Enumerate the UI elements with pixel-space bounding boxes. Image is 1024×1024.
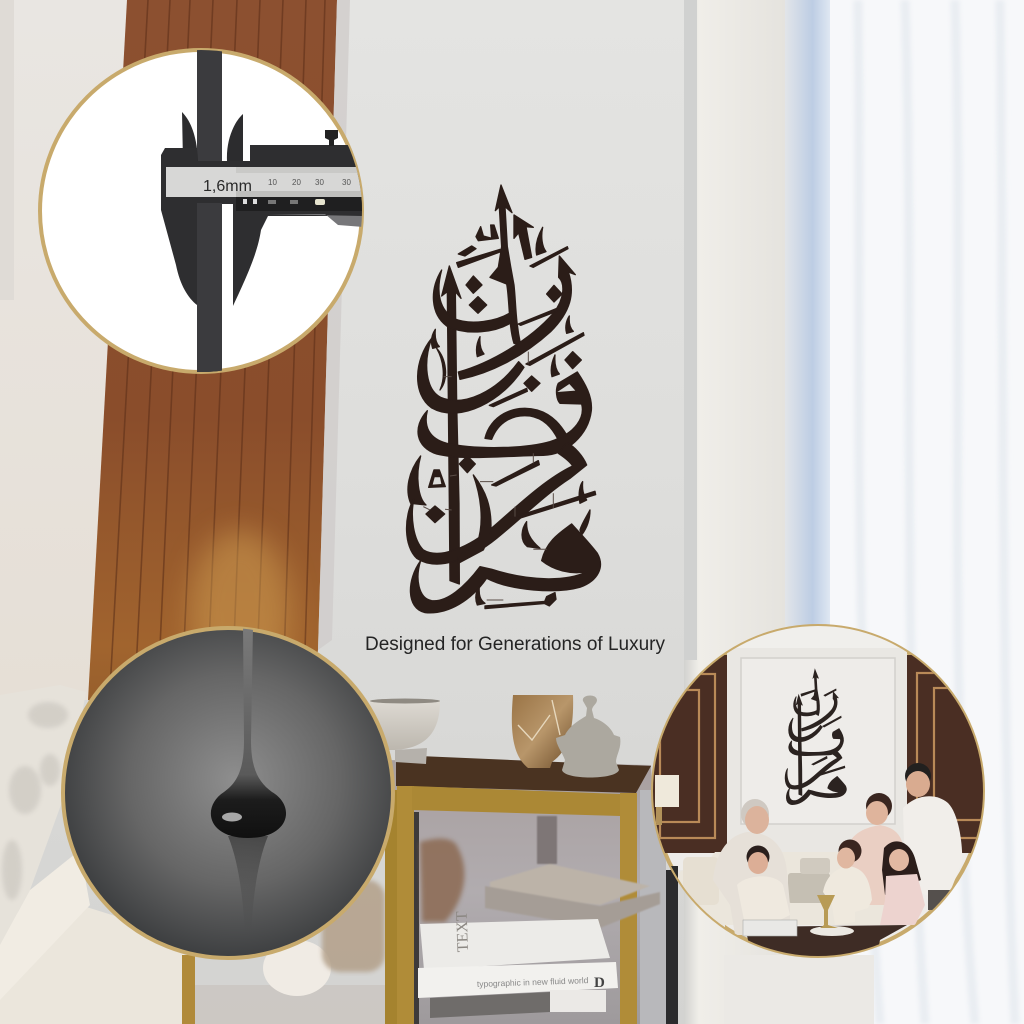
measurement reading: 1,6mm — [203, 178, 252, 195]
scale numbers: 30 — [315, 178, 324, 187]
circle: caliper thickness measurement — [40, 48, 364, 378]
scale numbers: 30 — [342, 178, 351, 187]
sofa and cushion — [0, 685, 195, 1024]
mother — [852, 793, 902, 905]
reflection beneath drop — [228, 836, 268, 898]
thumb screw — [325, 130, 338, 146]
brown marble cup — [512, 695, 573, 768]
calligraphy wall art — [407, 185, 600, 613]
small calligraphy on wall — [785, 670, 846, 805]
wall shadow beside wood panel — [318, 0, 350, 650]
grandmother — [713, 799, 790, 935]
girl in pink dress — [880, 841, 925, 925]
beam lower edge — [268, 214, 364, 227]
marble bowl — [370, 700, 440, 750]
circle: family lifestyle scene — [651, 624, 985, 958]
book stack with white covers: typographic in new fluid world — [477, 975, 589, 989]
sofa — [678, 852, 890, 925]
book stack with white covers: TEXT — [454, 911, 472, 952]
lower wall and dark post — [650, 853, 665, 965]
window column and curtains — [684, 0, 1024, 1024]
wooden slat panel — [88, 0, 337, 760]
coffee table — [747, 925, 907, 956]
lamp — [655, 775, 679, 807]
caliper jaws — [182, 112, 243, 162]
caption: Designed for Generations of Luxury: Designed for Generations of Luxury — [365, 634, 665, 655]
sculpture on the floor — [195, 880, 385, 1024]
decor objects on cabinet — [370, 695, 620, 778]
scale numbers — [268, 179, 351, 185]
book stack with white covers — [418, 911, 618, 1018]
white wainscot wall panel — [727, 648, 907, 656]
scale numbers: 20 — [292, 178, 301, 187]
steel scale — [166, 167, 364, 197]
strap of the wall art — [197, 48, 222, 378]
circle: liquid drop finish — [63, 626, 393, 958]
vase reflection — [420, 839, 464, 922]
scale numbers: 10 — [268, 178, 277, 187]
girl in white dress — [823, 840, 872, 905]
ceiling band — [736, 626, 900, 648]
console cabinet — [385, 755, 678, 1024]
father — [903, 763, 962, 910]
silver lidded jar — [556, 696, 620, 778]
bead highlight — [222, 812, 242, 822]
book stack with white covers: D — [594, 975, 605, 991]
gold moulding frames — [640, 673, 1007, 838]
dark wood wall panels — [650, 655, 727, 853]
blurred book stack — [485, 816, 660, 928]
toddler on lap — [737, 846, 790, 925]
falling liquid stream and bead — [211, 626, 286, 838]
table items — [743, 895, 854, 936]
